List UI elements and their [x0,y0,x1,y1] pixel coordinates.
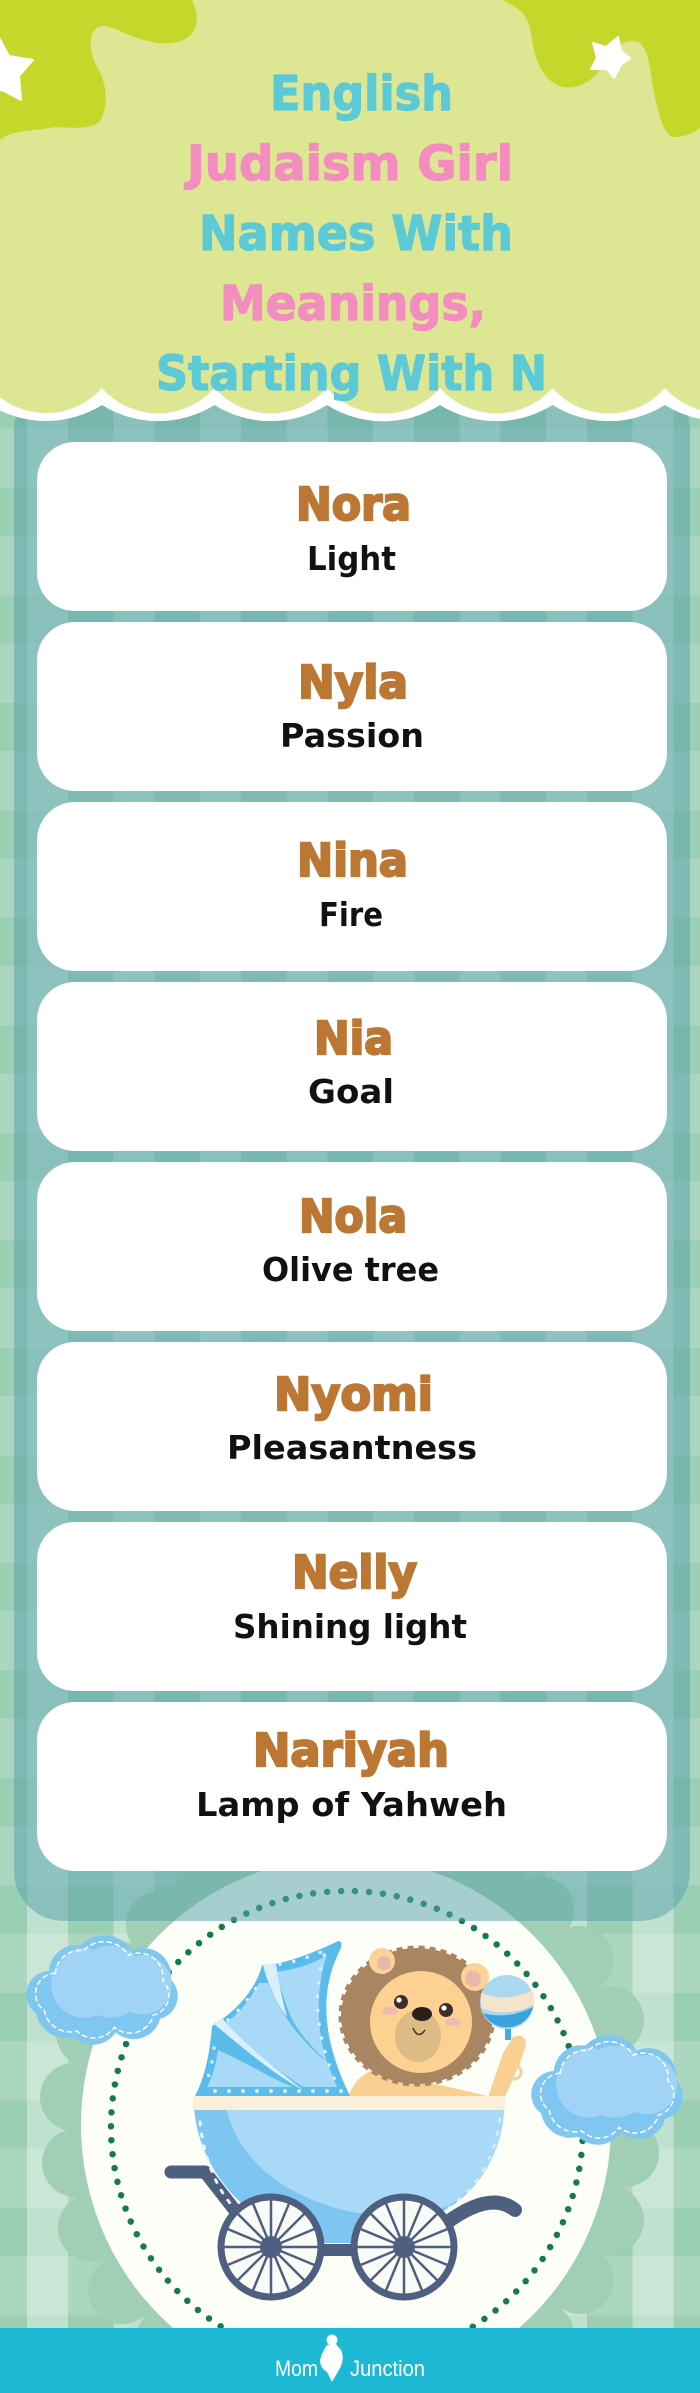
card: Nora [37,442,667,611]
card: Nora: Light [307,539,396,578]
title: English [270,66,453,122]
icon: mother and child [320,2334,343,2382]
card: Nyomi [37,1342,667,1511]
title: Starting With N [156,346,547,402]
card: Nola [37,1162,667,1331]
title [156,66,547,402]
card: Nina [37,802,667,971]
card: Nyomi: Nyomi [274,1368,433,1421]
card: Nina: Fire [319,895,383,934]
stroller hood [195,1941,350,2096]
lion face [370,1971,472,2073]
wheel right [354,2197,454,2297]
card: Nelly: Shining light [233,1607,467,1646]
translucent teal panel [14,380,690,1921]
card: Nariyah [37,1702,667,1871]
logo: MomJunction [275,2334,425,2382]
wheel left [221,2197,321,2297]
card: Nyla [37,622,667,791]
illustration: lion in stroller [171,1941,534,2297]
card: Nia: Goal [308,1072,394,1111]
rattle [480,1975,534,2040]
card: Nariyah: Lamp of Yahweh [196,1785,507,1824]
logo: MomJunction: Mom [275,2356,318,2381]
card: Nora: Nora [296,478,411,531]
card: Nelly: Nelly [292,1546,417,1599]
card: Nelly [37,1522,667,1691]
footer bar [0,2328,700,2393]
icon: cloud right [531,2035,683,2145]
lime blob top right [502,0,700,137]
dotted ring [111,1891,583,2363]
cream medallion [81,1857,611,2393]
title: Names With [199,206,513,262]
stroller basket [193,2096,505,2243]
lion mane [341,1948,493,2084]
scalloped green backdrop behind medallion [40,1841,659,2393]
logo: MomJunction: Junction [350,2356,425,2381]
axle [271,2244,404,2256]
card: Nia [37,982,667,1151]
lion body and arm [348,2036,526,2097]
card: Nyla: Passion [280,716,424,755]
icon: cloud left [26,1935,178,2045]
header banner [0,0,700,421]
title: Meanings, [220,276,486,332]
card: Nyla: Nyla [298,656,408,709]
stroller handles [171,2172,515,2224]
star left [0,36,33,100]
card: Nariyah: Nariyah [253,1724,449,1777]
card: Nia: Nia [314,1012,393,1065]
card: Nola: Nola [299,1190,407,1243]
card: Nina: Nina [297,834,408,887]
lime blob top left [0,0,197,140]
title: Judaism Girl [184,136,513,192]
card: Nola: Olive tree [262,1250,439,1289]
card: Nyomi: Pleasantness [227,1428,477,1467]
star right [591,37,630,78]
lion ears [369,1948,489,1991]
